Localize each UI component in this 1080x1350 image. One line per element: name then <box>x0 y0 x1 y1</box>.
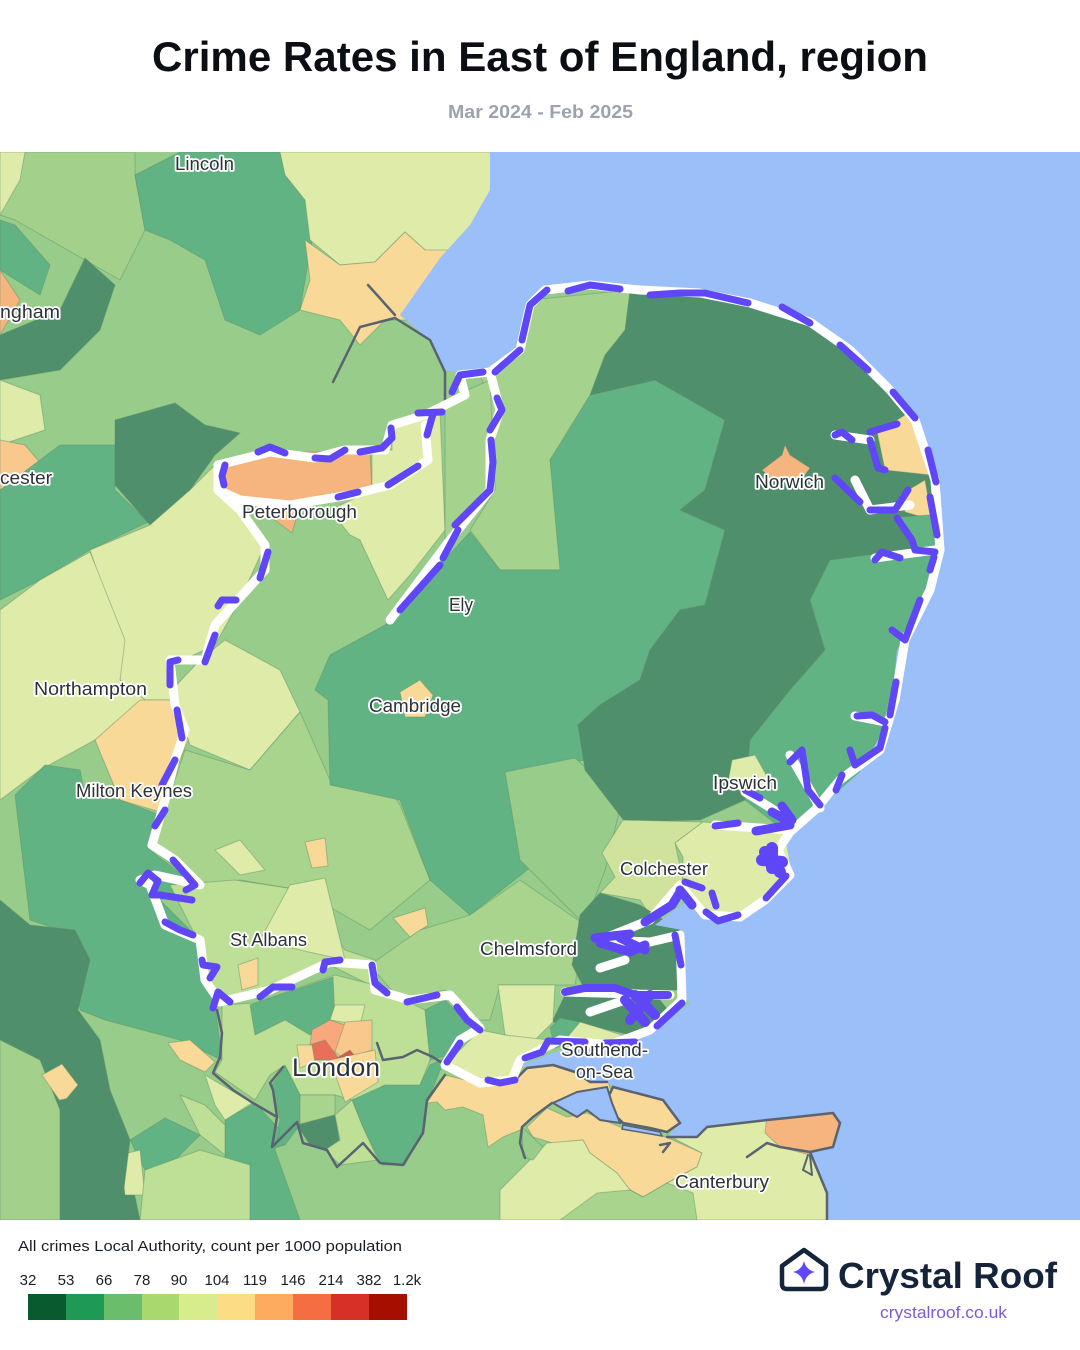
title: Crime Rates in East of England, region <box>152 33 928 80</box>
Herts / Central Beds <box>155 712 430 930</box>
Surrey / Berks <box>225 1103 300 1220</box>
white region outline <box>140 285 940 1083</box>
legend value labels: 90 <box>171 1272 187 1289</box>
Kent <box>427 1062 612 1147</box>
place names: Northampton <box>34 679 147 699</box>
coastline and estuary borders <box>213 285 840 1220</box>
legend title: All crimes Local Authority, count per 1000 population <box>18 1238 402 1255</box>
Isle of Sheppey <box>607 1087 680 1132</box>
place names: ngham <box>0 302 60 322</box>
place names: Cambridge <box>369 696 461 716</box>
legend value labels: 382 <box>356 1272 382 1289</box>
place names <box>0 154 824 1192</box>
logo: Crystal Roof <box>782 1250 1058 1322</box>
legend value labels <box>20 1272 422 1289</box>
choropleth map <box>0 152 1080 1220</box>
logo wordmark: Crystal Roof <box>838 1255 1058 1296</box>
place names: Colchester <box>620 859 708 879</box>
Swale water <box>622 1125 662 1136</box>
place names: Canterbury <box>675 1172 769 1192</box>
legend value labels: 53 <box>58 1272 74 1289</box>
place names: Ely <box>449 595 473 615</box>
place names: Norwich <box>755 472 824 492</box>
Greater London and surroundings <box>215 975 430 1100</box>
place names: Chelmsford <box>480 939 577 959</box>
legend value labels: 146 <box>280 1272 306 1289</box>
Essex <box>600 820 703 915</box>
subtitle: date range: Mar 2024 - Feb 2025 <box>448 101 633 122</box>
legend value labels: 119 <box>243 1272 267 1289</box>
legend value labels: 214 <box>318 1272 344 1289</box>
website link text: crystalroof.co.uk <box>880 1303 1008 1322</box>
legend value labels: 104 <box>204 1272 230 1289</box>
place names: Lincoln <box>175 154 234 174</box>
Suffolk coastal <box>744 554 931 824</box>
legend value labels: 32 <box>20 1272 36 1289</box>
place names: Peterborough <box>242 502 357 522</box>
place names: London <box>292 1054 380 1082</box>
Cambs / Norfolk south mid-green <box>315 380 725 915</box>
Norfolk dark <box>578 290 940 822</box>
Medway estuary water <box>553 1087 620 1123</box>
place names: Southend- <box>561 1040 648 1060</box>
place names: Milton Keynes <box>76 781 192 801</box>
place names: cester <box>0 468 52 488</box>
legend colour scale <box>28 1294 407 1320</box>
place names: St Albans <box>230 930 307 950</box>
legend value labels: 1.2k <box>393 1272 422 1289</box>
Fens / west Norfolk <box>470 290 630 570</box>
legend value labels: 78 <box>134 1272 150 1289</box>
legend value labels: 66 <box>96 1272 112 1289</box>
sea <box>400 152 1080 1220</box>
icon: house with star <box>782 1250 826 1289</box>
place names: on-Sea <box>576 1062 634 1082</box>
purple dashed route <box>140 285 937 1083</box>
place names: Ipswich <box>713 773 777 793</box>
district polygons <box>0 152 945 1220</box>
